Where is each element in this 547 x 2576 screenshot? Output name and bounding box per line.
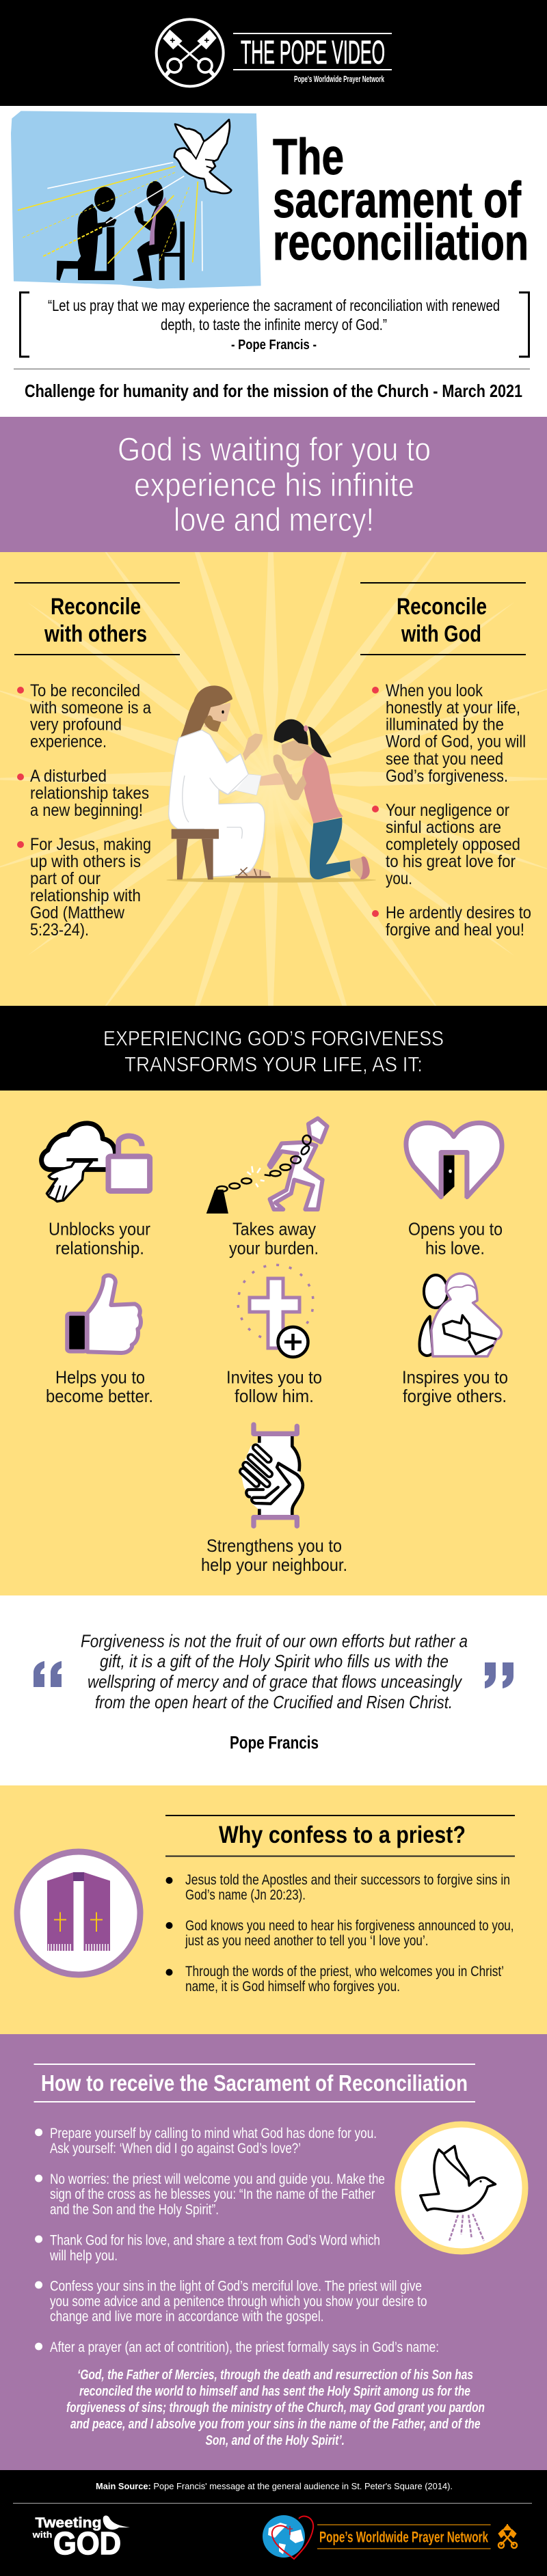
logo: tweeting with God: Tweeting xyxy=(36,2515,101,2531)
caption: strengthens xyxy=(201,1535,347,1575)
caption: forgive: forgive others. xyxy=(403,1386,507,1406)
bullet list: reconcile with God: He ardently desires to xyxy=(386,903,531,922)
quote text: from the open heart of the Crucified and Risen Christ. xyxy=(95,1692,453,1712)
bullet list: reconcile with others: For Jesus, making xyxy=(30,835,151,854)
yellow background with sun rays xyxy=(0,478,547,1080)
icon: dove in circle xyxy=(398,2124,525,2251)
main source: Main Source: Pope Francis' message at the general audience in St. Peter's Square (2014). xyxy=(96,2482,453,2491)
caption: opens: his love. xyxy=(425,1238,485,1259)
bullet list: how to receive: Thank God for his love, and share a text from God’s Word which xyxy=(50,2232,380,2248)
bullet list: reconcile with God xyxy=(372,681,531,940)
caption: strengthens: Strengthens you to xyxy=(206,1535,342,1556)
prayer quote with brackets: depth, to taste the infinite mercy of God.” xyxy=(161,316,387,333)
caption: follow: follow him. xyxy=(235,1386,314,1406)
bullet list: reconcile with others: To be reconciled xyxy=(30,681,140,700)
caption: strengthens: help your neighbour. xyxy=(201,1554,347,1575)
icon: closing quote mark xyxy=(485,1662,513,1688)
caption: follow xyxy=(226,1367,322,1406)
absolution prayer xyxy=(66,2368,485,2448)
caption: forgive: Inspires you to xyxy=(402,1367,508,1387)
icon: clasped hands xyxy=(241,1425,303,1526)
icon: two people embracing xyxy=(420,1274,501,1356)
title xyxy=(273,128,529,271)
bullet list: reconcile with others: relationship with xyxy=(30,886,141,905)
icon: thumbs up xyxy=(67,1276,141,1353)
caption: better: Helps you to xyxy=(55,1367,145,1387)
bullet list: reconcile with others: a new beginning! xyxy=(30,801,143,820)
logo: tweeting with God: GOD xyxy=(53,2525,121,2561)
column heading: reconcile with others: Reconcile xyxy=(51,594,141,620)
column heading: reconcile with God: with God xyxy=(401,621,481,647)
caption: better xyxy=(46,1367,153,1406)
caption: unblocks: Unblocks your xyxy=(49,1219,150,1239)
caption: unblocks: relationship. xyxy=(55,1238,144,1259)
pope francis quote panel: Pope Francis xyxy=(230,1732,319,1753)
bullet list: how to receive: change and live more in accordance with the gospel. xyxy=(50,2308,324,2325)
panel: how to receive the sacrament xyxy=(0,2034,547,2470)
logo wordmark: Pope's Worldwide Prayer Network xyxy=(294,74,384,84)
bullet list: why confess: just as you need another to tell you ‘I love you’. xyxy=(185,1933,428,1949)
bullet list: how to receive: will help you. xyxy=(49,2247,118,2264)
logo: globe and heart xyxy=(263,2515,313,2559)
illustration: penitent and priest under the dove xyxy=(11,111,261,289)
prayer quote with brackets: - Pope Francis - xyxy=(231,338,317,353)
bullet list: why confess: God’s name (Jn 20:23). xyxy=(185,1887,306,1903)
caption: follow: Invites you to xyxy=(226,1367,322,1387)
bullet list: why confess: name, it is God himself who forgives you. xyxy=(185,1979,400,1995)
caption: burden: your burden. xyxy=(229,1238,319,1259)
icon: runner breaking chain xyxy=(206,1119,328,1214)
logo wordmark xyxy=(233,33,392,84)
bullet list: how to receive: sign of the cross as he blesses you: “In the name of the Father xyxy=(50,2186,375,2202)
bullet list: how to receive: you some advice and a penitence through which you show your desire to xyxy=(50,2293,427,2310)
bullet list: how to receive: After a prayer (an act of contrition), the priest formally says in God’s name: xyxy=(50,2339,439,2355)
icon: cloud, hand and open lock xyxy=(42,1123,150,1201)
absolution prayer: Son, and of the Holy Spirit’. xyxy=(205,2433,345,2448)
header band xyxy=(0,0,547,106)
caption: burden: Takes away xyxy=(232,1219,316,1239)
caption: forgive xyxy=(402,1367,508,1406)
bullet list: reconcile with God: Your negligence or xyxy=(386,801,509,820)
quote text xyxy=(81,1630,468,1712)
column heading: reconcile with others: with others xyxy=(44,621,147,647)
logo: tweeting with God: with xyxy=(32,2530,52,2540)
bullet list: reconcile with others: part of our xyxy=(30,869,101,888)
column heading: reconcile with God: Reconcile xyxy=(397,594,487,620)
prayer quote with brackets xyxy=(21,292,529,357)
bullet list: reconcile with God: When you look xyxy=(386,681,483,700)
logo wordmark: THE POPE VIDEO xyxy=(241,35,385,71)
bullet list: how to receive: Prepare yourself by calling to mind what God has done for you. xyxy=(50,2125,377,2141)
bullet list: how to receive xyxy=(35,2125,439,2355)
bullet list: reconcile with God: you. xyxy=(386,869,412,888)
yellow icon section background xyxy=(0,1091,547,1595)
logo: tweeting with God xyxy=(32,2515,130,2561)
bullet list: reconcile with others: very profound xyxy=(30,715,122,734)
black banner: experiencing forgiveness: EXPERIENCING GOD’S FORGIVENESS xyxy=(103,1026,444,1050)
icon: opening quote mark xyxy=(34,1661,62,1687)
caption: unblocks xyxy=(49,1219,150,1259)
black banner: experiencing forgiveness xyxy=(0,1006,547,1091)
bullet list: how to receive: Ask yourself: ‘When did I go against God’s love?’ xyxy=(50,2140,301,2156)
bullet list: reconcile with God: completely opposed xyxy=(386,835,520,854)
title: The xyxy=(273,128,344,185)
logo: orange keys xyxy=(498,2524,517,2548)
pope francis quote panel xyxy=(0,1595,547,1785)
bullet list: reconcile with God: see that you need xyxy=(386,750,503,769)
illustration: Jesus and kneeling girl xyxy=(166,685,376,883)
bullet list: reconcile with God: Word of God, you will xyxy=(386,732,526,752)
caption: better: become better. xyxy=(46,1386,153,1406)
bullet list: reconcile with others: relationship takes xyxy=(30,784,149,803)
bullet list: how to receive: No worries: the priest will welcome you and guide you. Make the xyxy=(50,2171,385,2187)
caption: opens xyxy=(408,1219,503,1259)
footer xyxy=(0,2470,547,2576)
icon: cross with plus xyxy=(238,1265,313,1357)
column heading: reconcile with others xyxy=(14,582,180,655)
icon: heart with open door xyxy=(406,1123,502,1199)
quote text: wellspring of mercy and of grace that flows unceasingly xyxy=(88,1671,463,1692)
purple headline band: love and mercy! xyxy=(174,502,374,538)
quote text: gift, it is a gift of the Holy Spirit who fills us with the xyxy=(100,1651,449,1671)
bullet list: reconcile with God: forgive and heal you! xyxy=(386,920,524,940)
bullet list: reconcile with others: God (Matthew xyxy=(30,903,125,922)
bullet list: reconcile with others: A disturbed xyxy=(30,767,107,786)
bullet list: reconcile with God: to his great love for xyxy=(386,852,516,871)
icon: purple stole xyxy=(17,1852,140,1975)
caption: burden xyxy=(229,1219,319,1259)
bullet list: reconcile with God: illuminated by the xyxy=(386,715,504,734)
bullet list: reconcile with others: up with others is xyxy=(30,852,141,871)
logo: crossed keys xyxy=(157,19,224,86)
bullet list: reconcile with others xyxy=(17,681,151,940)
bullet list: reconcile with others: experience. xyxy=(30,732,107,752)
bullet list: how to receive: Confess your sins in the light of God’s merciful love. The priest will give xyxy=(50,2278,422,2294)
panel: how to receive the sacrament: How to receive the Sacrament of Reconciliation xyxy=(41,2070,468,2096)
bullet list: reconcile with others: with someone is a xyxy=(29,698,151,717)
bullet list: reconcile with God: God’s forgiveness. xyxy=(386,767,508,786)
black banner: experiencing forgiveness: TRANSFORMS YOUR LIFE, AS IT: xyxy=(124,1052,423,1076)
panel: why confess to a priest xyxy=(0,1785,547,2034)
column heading: reconcile with God xyxy=(360,582,526,655)
purple headline band: God is waiting for you to xyxy=(118,432,431,468)
bullet list: why confess xyxy=(165,1872,514,1995)
bullet list: reconcile with God: sinful actions are xyxy=(386,818,501,837)
bullet list: reconcile with God: honestly at your life, xyxy=(386,698,520,717)
caption: opens: Opens you to xyxy=(408,1219,503,1239)
panel: why confess to a priest: Why confess to a priest? xyxy=(219,1822,466,1848)
bullet list: reconcile with others: 5:23-24). xyxy=(30,920,89,940)
purple headline band: experience his infinite xyxy=(134,467,414,504)
bullet list: how to receive: and the Son and the Holy Spirit”. xyxy=(50,2202,219,2218)
quote text: Forgiveness is not the fruit of our own efforts but rather a xyxy=(81,1630,468,1651)
purple headline band xyxy=(0,417,547,552)
